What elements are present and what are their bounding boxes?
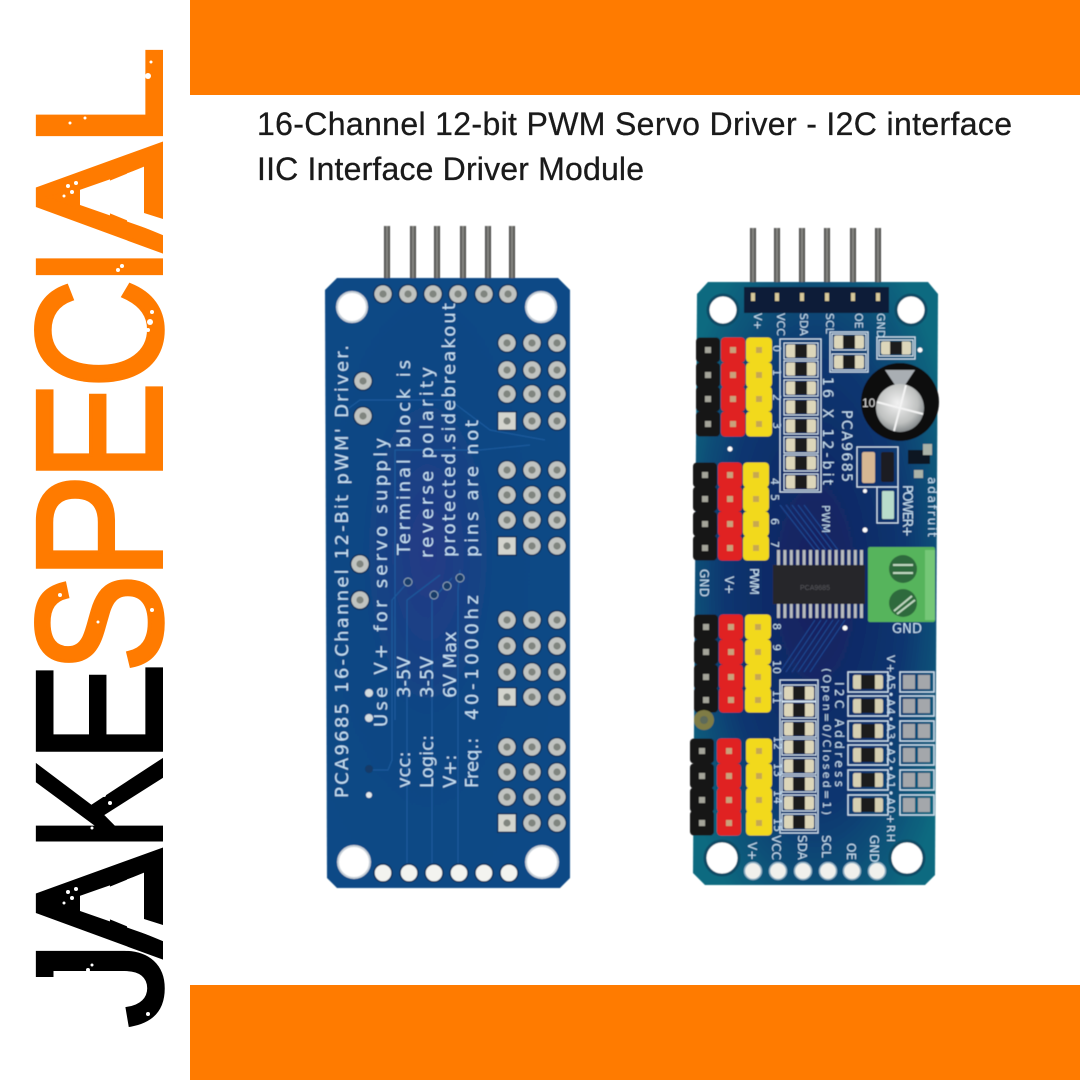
- vertical logo: JAKESPECIAL: A: [0, 143, 200, 251]
- silkscreen text (front): GND: [867, 835, 881, 863]
- top solder pads (back): [373, 284, 518, 304]
- vertical logo: JAKESPECIAL: C: [0, 279, 200, 389]
- mid pads and vias (back): [350, 371, 464, 798]
- photo: back of PCB module: [325, 226, 570, 888]
- silkscreen text (front): GND: [697, 569, 711, 597]
- silkscreen text (back): Logic:: [417, 735, 438, 788]
- silkscreen text (front): GND: [874, 313, 887, 338]
- silkscreen text (front): VCC: [774, 313, 787, 336]
- vertical logo: JAKESPECIAL: I: [0, 247, 199, 287]
- bottom through holes (front): [744, 862, 886, 880]
- title: IIC Interface Driver Module: [257, 151, 644, 187]
- silkscreen text (front): OE: [844, 843, 858, 860]
- silkscreen text (front): 14: [771, 790, 784, 804]
- silkscreen text (front): 12: [771, 736, 784, 750]
- silkscreen text (front): 9: [770, 644, 783, 651]
- vertical logo: JAKESPECIAL: S: [0, 574, 199, 673]
- traces (back): [349, 400, 545, 870]
- mounting holes (front): [705, 295, 926, 875]
- silkscreen text (front): V+A5•A4•A3•A2•A1•A0+RH: [884, 655, 897, 842]
- silkscreen text (back): reverse polarity: [417, 367, 438, 558]
- silkscreen text (front): 8: [770, 623, 783, 630]
- silkscreen text (front): SCL: [823, 313, 836, 335]
- header pins (back): [384, 226, 515, 280]
- dark header strip (front): [744, 287, 889, 313]
- silkscreen text (back): vcc:: [394, 751, 415, 788]
- mounting holes (back): [337, 292, 558, 878]
- small capacitors top: [830, 332, 915, 372]
- vertical logo: JAKESPECIAL: A: [0, 849, 200, 957]
- silkscreen text (front): PWM: [819, 505, 832, 533]
- vertical logo: JAKESPECIAL: J: [0, 940, 199, 1028]
- PCA9685 IC chip: PCA9685: [800, 585, 830, 592]
- silkscreen text (front): V+: [745, 842, 759, 860]
- servo header solder pads (back): [497, 333, 567, 833]
- bottom orange banner: [190, 985, 1080, 1080]
- silkscreen text (back): 40-1000hz: [462, 595, 483, 720]
- fan-out traces (front): [780, 505, 845, 672]
- silkscreen text (back): [332, 303, 483, 798]
- title: 16-Channel 12-bit PWM Servo Driver - I2C interface: [257, 106, 1012, 142]
- photo: front of PCB module: [690, 228, 939, 885]
- silkscreen text (front): PCA9685: [838, 410, 854, 482]
- silkscreen text (back): V+:: [440, 755, 461, 788]
- silkscreen text (front): 5: [768, 494, 781, 501]
- vertical logo: JAKESPECIAL: E: [0, 663, 199, 762]
- silkscreen text (front): 1: [770, 369, 783, 376]
- vertical logo: JAKESPECIAL: [0, 46, 200, 1027]
- silkscreen text (front): POWER+: [899, 485, 914, 537]
- header pin tips (front): [751, 293, 880, 301]
- silkscreen text (back): PCA9685 16-Channel 12-Bit pWM' Driver.: [332, 345, 353, 798]
- silkscreen text (front): VCC: [769, 835, 783, 860]
- silkscreen text (front): 16 X 12-bit: [819, 377, 835, 486]
- silkscreen text (front): I2C Address: [832, 682, 846, 787]
- via hole and small dots: [694, 348, 922, 730]
- top orange banner: [190, 0, 1080, 95]
- address jumpers: [848, 672, 934, 815]
- silkscreen text (front): 3: [770, 422, 783, 429]
- silkscreen text (front): OE: [852, 313, 865, 329]
- silkscreen text (front): [697, 313, 939, 863]
- servo headers group 3: [694, 614, 771, 712]
- silkscreen text (front): 15: [771, 818, 784, 832]
- silkscreen text (back): protected.sidebreakout: [439, 303, 460, 557]
- silkscreen text (front): 10: [770, 660, 783, 674]
- silkscreen text (front): 2: [770, 394, 783, 401]
- board body (front): [693, 282, 938, 885]
- silkscreen text (front): 0: [770, 345, 783, 352]
- silkscreen text (front): PWM: [747, 568, 761, 595]
- silkscreen text (back): Terminal block is: [394, 360, 415, 556]
- resistor array bottom: [780, 680, 818, 833]
- silkscreen text (back): pins are not: [462, 420, 483, 557]
- silkscreen text (front): 4: [768, 478, 781, 485]
- silkscreen text (front): GND: [892, 622, 922, 637]
- bottom through holes (back): [374, 864, 518, 882]
- silkscreen text (back): 6V Max: [440, 631, 461, 698]
- silkscreen text (front): SDA: [797, 313, 810, 336]
- silkscreen text (front): (Open=0/Closed=1): [820, 668, 833, 815]
- silkscreen text (front): V+: [751, 313, 764, 330]
- vertical logo: JAKESPECIAL: P: [0, 474, 199, 580]
- resistor array top: [780, 339, 821, 492]
- servo headers group 4: [690, 738, 772, 836]
- silkscreen text (front): 7: [768, 541, 781, 548]
- silkscreen text (front): 11: [770, 690, 783, 704]
- silkscreen text (front): V+: [722, 576, 736, 594]
- silkscreen text (front): 6: [768, 518, 781, 525]
- green screw terminal: [868, 547, 935, 622]
- silkscreen text (front): SCL: [819, 835, 833, 858]
- vertical logo: JAKESPECIAL: K: [0, 760, 199, 851]
- electrolytic capacitor: 10: [862, 396, 876, 410]
- vertical logo: JAKESPECIAL: L: [0, 46, 199, 149]
- LED and power components: [857, 444, 932, 523]
- silkscreen text (back): Freq.:: [462, 738, 483, 788]
- servo headers group 2: [693, 462, 769, 560]
- vertical logo: JAKESPECIAL: E: [0, 382, 199, 481]
- silkscreen text (front): adafruit: [925, 477, 939, 537]
- silkscreen text (front): SDA: [795, 835, 809, 861]
- PCA9685 IC chip: [773, 550, 865, 618]
- silkscreen text (back): Use V+ for servo supply: [371, 438, 392, 727]
- silkscreen text (front): 13: [771, 763, 784, 777]
- title: [257, 106, 1012, 187]
- board body (back): [325, 278, 570, 888]
- header pins (front): [750, 228, 881, 300]
- silkscreen text (back): 3-5V: [417, 656, 438, 698]
- silkscreen text (back): 3-5V: [394, 656, 415, 698]
- electrolytic capacitor: [861, 363, 939, 441]
- servo headers group 1: [696, 338, 772, 436]
